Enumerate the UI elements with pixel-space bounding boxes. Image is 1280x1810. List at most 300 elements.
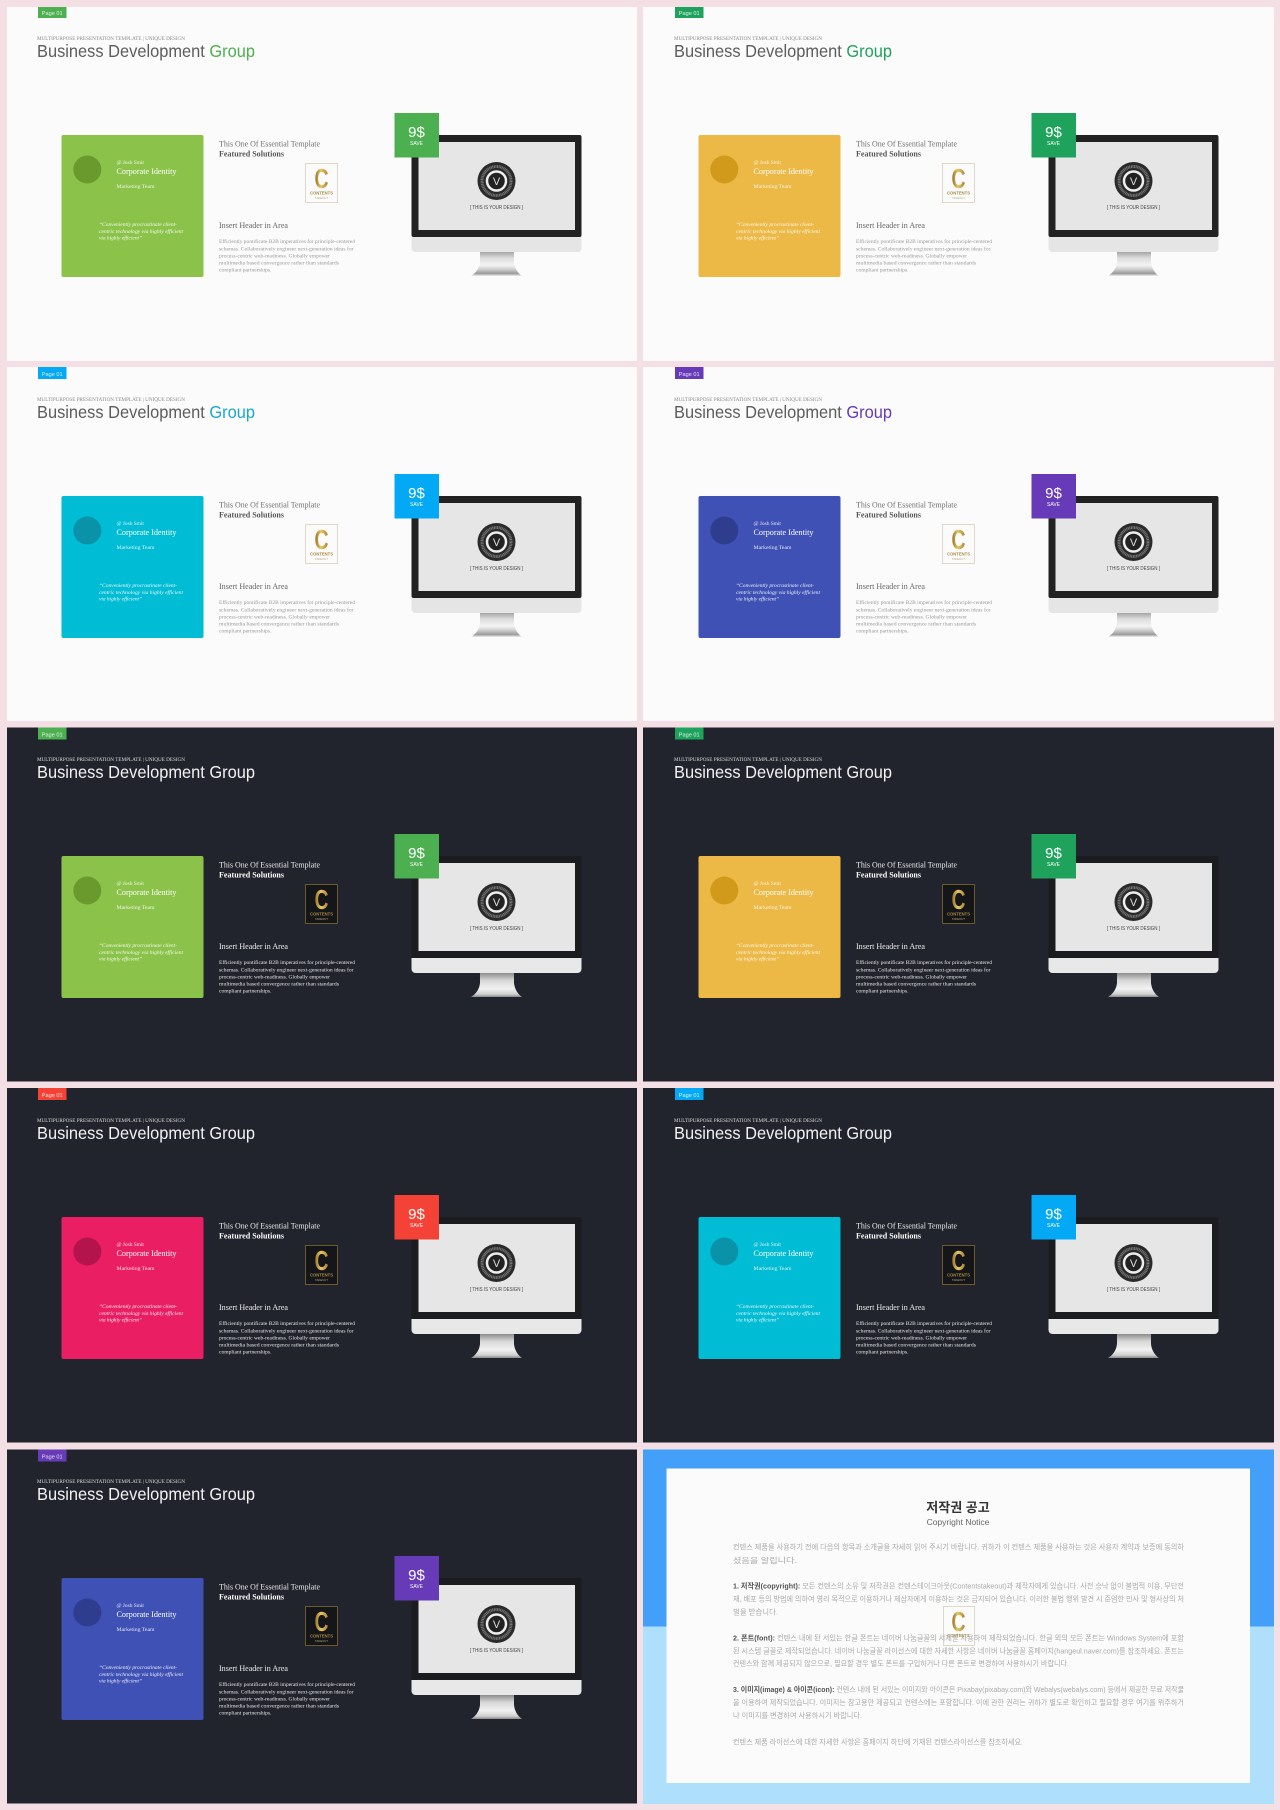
price badge: SAVE bbox=[410, 1223, 424, 1229]
profile card: centric technology via highly efficient bbox=[736, 228, 821, 235]
page tag: Page 01 bbox=[679, 732, 700, 738]
page tag: Page 01 bbox=[42, 1093, 63, 1099]
text block: insert header: multimedia based convergence rather than standards bbox=[856, 1342, 976, 1348]
text block: insert header: process-centric web-readiness. Globally empower bbox=[219, 974, 330, 980]
title: Business Development Group bbox=[674, 762, 892, 782]
profile card: “Conveniently procrastinate client- bbox=[736, 221, 814, 228]
text block: insert header bbox=[856, 221, 992, 274]
text block: featured solutions bbox=[856, 860, 957, 880]
text block: insert header: process-centric web-readiness. Globally empower bbox=[856, 1335, 967, 1341]
profile card bbox=[698, 135, 840, 277]
page tag: Page 01 bbox=[42, 732, 63, 738]
text block: insert header: schemas. Collaboratively engineer next-generation ideas for bbox=[856, 966, 991, 973]
text block: insert header: Efficiently pontificate B2B imperatives for principle-centered bbox=[856, 959, 992, 966]
text block: insert header: schemas. Collaboratively engineer next-generation ideas for bbox=[856, 245, 991, 252]
text block: insert header: multimedia based convergence rather than standards bbox=[856, 621, 976, 627]
text block: insert header: process-centric web-readiness. Globally empower bbox=[219, 1335, 330, 1341]
notice body text: 벌을 받습니다. bbox=[733, 1608, 778, 1616]
monitor mockup: [ THIS IS YOUR DESIGN ] bbox=[470, 1648, 524, 1654]
text block: insert header: Efficiently pontificate B2B imperatives for principle-centered bbox=[219, 238, 355, 245]
text block: featured solutions bbox=[219, 500, 320, 520]
panel: light indigo slide bbox=[643, 367, 1274, 721]
notice body text: 컨텐스와 함께 제공되지 않으므로, 필요할 경우 별도 폰트를 구입하거나 다른 폰트로 변경하여 사용하시기 바랍니다. bbox=[733, 1659, 1069, 1668]
price badge bbox=[1032, 474, 1076, 518]
logo badge bbox=[942, 524, 974, 564]
text block: insert header: process-centric web-readiness. Globally empower bbox=[856, 614, 967, 620]
price badge bbox=[394, 1556, 439, 1600]
monitor mockup: [ THIS IS YOUR DESIGN ] bbox=[470, 205, 524, 211]
text block: insert header: schemas. Collaboratively engineer next-generation ideas for bbox=[219, 1688, 354, 1695]
notice body text: 3. 이미지(image) & 아이콘(icon): 컨텐스 내에 된 서있는 이미지와 아이콘은 Pixabay(pixabay.com)와 Webalys(webalys.com) 등에서 제공한 무료 저작물 bbox=[733, 1685, 1184, 1694]
logo badge: TAKEOUT bbox=[952, 557, 965, 561]
profile card: Marketing Team bbox=[116, 1627, 155, 1633]
text block: insert header: compliant partnerships. bbox=[219, 1710, 272, 1716]
text block: featured solutions: Featured Solutions bbox=[856, 150, 921, 158]
price badge: SAVE bbox=[1047, 141, 1061, 147]
price badge: 9$ bbox=[408, 485, 425, 502]
profile card bbox=[698, 856, 840, 998]
profile card: “Conveniently procrastinate client- bbox=[99, 1664, 177, 1671]
monitor mockup bbox=[1048, 496, 1218, 637]
text block: insert header: compliant partnerships. bbox=[856, 1350, 909, 1356]
text block: featured solutions bbox=[856, 500, 957, 520]
profile card: Marketing Team bbox=[754, 184, 792, 190]
title: Business Development Group bbox=[37, 1484, 255, 1504]
page tag bbox=[38, 1088, 66, 1100]
text block: insert header: schemas. Collaboratively engineer next-generation ideas for bbox=[219, 1327, 354, 1334]
panel: dark green slide bbox=[7, 728, 637, 1082]
monitor mockup: V bbox=[1130, 176, 1138, 188]
text block: featured solutions: This One Of Essential Template bbox=[219, 1582, 320, 1592]
notice body text: 을 이용하여 제작되었습니다. 이미지는 참고용만 제공되고 컨텐스에는 포함합니다. 이에 관한 권리는 귀하가 별도로 확인하고 필요할 경우 여기를 위주하거 bbox=[733, 1698, 1184, 1707]
price badge: SAVE bbox=[410, 141, 424, 147]
text block: insert header: Efficiently pontificate B2B imperatives for principle-centered bbox=[856, 1320, 992, 1327]
price badge bbox=[1032, 834, 1076, 878]
profile card: via highly efficient” bbox=[99, 1678, 142, 1684]
text block: insert header bbox=[856, 942, 992, 994]
text block: insert header: Insert Header in Area bbox=[219, 942, 288, 951]
profile card bbox=[62, 135, 204, 277]
logo badge bbox=[306, 884, 338, 924]
page tag: Page 01 bbox=[679, 372, 700, 378]
text block: featured solutions bbox=[219, 140, 320, 158]
monitor mockup: V bbox=[493, 1619, 501, 1631]
price badge: SAVE bbox=[410, 1584, 424, 1590]
monitor mockup: V bbox=[493, 537, 501, 549]
price badge: 9$ bbox=[1045, 485, 1062, 502]
text block: featured solutions bbox=[856, 1222, 957, 1240]
logo badge: CONTENTS bbox=[947, 1272, 970, 1278]
text block: insert header: multimedia based convergence rather than standards bbox=[856, 981, 976, 987]
subtitle: MULTIPURPOSE PRESENTATION TEMPLATE | UNIQUE DESIGN bbox=[674, 1118, 822, 1124]
monitor mockup: V bbox=[1130, 537, 1138, 549]
text block: featured solutions: This One Of Essential Template bbox=[856, 140, 957, 148]
profile card bbox=[62, 496, 204, 638]
profile card bbox=[62, 856, 204, 998]
logo badge: CONTENTS bbox=[310, 1634, 333, 1638]
page tag: Page 01 bbox=[42, 1454, 63, 1460]
logo badge: C bbox=[314, 884, 328, 915]
logo badge bbox=[942, 163, 974, 202]
text block: featured solutions: Featured Solutions bbox=[856, 510, 921, 520]
profile card: via highly efficient” bbox=[99, 596, 142, 602]
notice body text: 셨음을 알립니다. bbox=[733, 1556, 797, 1565]
title: Business Development Group bbox=[674, 1123, 892, 1143]
title: Business Development Group bbox=[674, 402, 892, 422]
profile card: @ Josh Smit bbox=[116, 1242, 144, 1248]
page tag bbox=[38, 7, 66, 18]
panel: light yellow slide bbox=[643, 7, 1274, 361]
text block: insert header: multimedia based convergence rather than standards bbox=[219, 621, 339, 627]
price badge: SAVE bbox=[410, 502, 424, 508]
logo badge: CONTENTS bbox=[310, 1272, 333, 1278]
page tag bbox=[38, 728, 66, 740]
text block: featured solutions: Featured Solutions bbox=[219, 510, 284, 520]
page tag bbox=[675, 7, 704, 18]
text block: insert header: compliant partnerships. bbox=[856, 988, 909, 994]
logo badge: TAKEOUT bbox=[315, 917, 328, 921]
text block: insert header: Insert Header in Area bbox=[219, 1303, 288, 1312]
text block: featured solutions: This One Of Essential Template bbox=[856, 500, 957, 510]
notice body text: 2. 폰트(font): 컨텐스 내에 된 서있는 한글 폰트는 네이버 나눔글꼴의 서체를 사용하여 제작되었습니다. 한글 외의 모든 폰트는 Windows System에 포함 bbox=[733, 1634, 1184, 1642]
logo badge bbox=[306, 163, 338, 202]
page tag: Page 01 bbox=[679, 1093, 700, 1099]
panel: copyright notice bbox=[643, 1450, 1274, 1804]
profile card: centric technology via highly efficient bbox=[99, 589, 184, 596]
text block: insert header: multimedia based convergence rather than standards bbox=[219, 981, 339, 987]
text block: insert header: schemas. Collaboratively engineer next-generation ideas for bbox=[856, 1327, 991, 1334]
profile card: Marketing Team bbox=[116, 1266, 155, 1272]
profile card: Corporate Identity bbox=[754, 887, 814, 897]
profile card: “Conveniently procrastinate client- bbox=[99, 582, 177, 589]
page tag bbox=[675, 1088, 704, 1100]
title: Business Development Group bbox=[37, 41, 255, 61]
logo badge: C bbox=[314, 1245, 328, 1276]
profile card: centric technology via highly efficient bbox=[736, 1310, 821, 1317]
profile card: centric technology via highly efficient bbox=[99, 1310, 184, 1317]
logo badge: CONTENTS bbox=[947, 190, 970, 196]
logo badge: C bbox=[314, 524, 328, 555]
text block: featured solutions: Featured Solutions bbox=[856, 870, 921, 880]
monitor mockup: [ THIS IS YOUR DESIGN ] bbox=[1107, 1287, 1161, 1293]
price badge: 9$ bbox=[408, 845, 425, 862]
profile card: centric technology via highly efficient bbox=[99, 949, 184, 956]
notice body text: 1. 저작권(copyright): 모든 컨텐스의 소유 및 저작권은 컨텐스테이크아웃(Contentstakeout)과 제작자에게 있습니다. 사전 승낙 없이 불법적 이용, 무단전 bbox=[733, 1582, 1184, 1590]
panel: light cyan slide bbox=[7, 367, 637, 721]
logo badge: TAKEOUT bbox=[315, 557, 328, 561]
profile card: @ Josh Smit bbox=[754, 881, 781, 887]
logo watermark bbox=[944, 1606, 974, 1646]
monitor mockup bbox=[1048, 856, 1218, 997]
text block: featured solutions bbox=[856, 140, 957, 158]
panel: dark indigo slide bbox=[7, 1450, 637, 1804]
text block: insert header: multimedia based convergence rather than standards bbox=[856, 260, 976, 266]
text block: insert header: Insert Header in Area bbox=[219, 221, 288, 230]
profile card: “Conveniently procrastinate client- bbox=[99, 1303, 177, 1310]
text block: featured solutions: This One Of Essential Template bbox=[219, 140, 320, 148]
logo badge bbox=[306, 1245, 338, 1284]
monitor mockup: [ THIS IS YOUR DESIGN ] bbox=[1107, 926, 1161, 932]
profile card: via highly efficient” bbox=[99, 1316, 142, 1324]
monitor mockup: V bbox=[493, 176, 501, 188]
logo badge: C bbox=[952, 163, 966, 194]
profile card: @ Josh Smit bbox=[116, 881, 144, 887]
profile card: Corporate Identity bbox=[116, 887, 177, 897]
text block: insert header: Efficiently pontificate B2B imperatives for principle-centered bbox=[219, 959, 355, 966]
profile card: @ Josh Smit bbox=[754, 1242, 781, 1248]
logo badge: TAKEOUT bbox=[315, 1639, 328, 1643]
text block: featured solutions: Featured Solutions bbox=[856, 1232, 921, 1240]
monitor mockup: [ THIS IS YOUR DESIGN ] bbox=[1107, 205, 1161, 211]
subtitle: MULTIPURPOSE PRESENTATION TEMPLATE | UNIQUE DESIGN bbox=[37, 1118, 185, 1124]
text block: insert header: schemas. Collaboratively engineer next-generation ideas for bbox=[219, 966, 354, 973]
profile card: @ Josh Smit bbox=[754, 521, 781, 527]
subtitle: MULTIPURPOSE PRESENTATION TEMPLATE | UNIQUE DESIGN bbox=[674, 397, 822, 403]
text block: featured solutions: Featured Solutions bbox=[219, 870, 284, 880]
notice body text: 된 시스템 글꼴로 제작되었습니다. 네이버 나눔글꼴 라이선스에 대한 자세한 사항은 네이버 나눔글꼴 홈페이지(hangeul.naver.com)를 참조하세요. 폰트는 bbox=[733, 1646, 1184, 1656]
logo badge: C bbox=[314, 1606, 328, 1637]
logo badge bbox=[942, 884, 974, 924]
profile card: centric technology via highly efficient bbox=[736, 949, 821, 956]
text block: insert header: Insert Header in Area bbox=[856, 1303, 925, 1312]
price badge: 9$ bbox=[1045, 124, 1062, 141]
price badge: SAVE bbox=[1047, 862, 1061, 868]
logo badge: C bbox=[952, 1245, 966, 1276]
panel: dark yellow slide bbox=[643, 728, 1274, 1082]
profile card: via highly efficient” bbox=[736, 956, 779, 962]
text block: insert header: compliant partnerships. bbox=[219, 1350, 272, 1356]
profile card: “Conveniently procrastinate client- bbox=[736, 582, 814, 589]
profile card: @ Josh Smit bbox=[116, 160, 144, 166]
logo badge: TAKEOUT bbox=[315, 1278, 328, 1282]
text block: insert header: Efficiently pontificate B2B imperatives for principle-centered bbox=[219, 1681, 355, 1688]
price badge: SAVE bbox=[1047, 1223, 1061, 1229]
monitor mockup bbox=[1048, 135, 1218, 276]
price badge: 9$ bbox=[408, 1567, 425, 1584]
text block: insert header bbox=[856, 582, 992, 634]
profile card bbox=[62, 1217, 204, 1359]
logo watermark: CONTENTS bbox=[948, 1633, 970, 1638]
notice body text: 컨텐스 제품 라이선스에 대한 자세한 사항은 홈페이지 하단에 기재된 컨텐스라이선스를 참조하세요. bbox=[733, 1738, 1023, 1746]
logo watermark: C bbox=[952, 1606, 966, 1637]
title: Business Development Group bbox=[37, 402, 255, 422]
monitor mockup bbox=[1048, 1217, 1218, 1358]
text block: insert header: compliant partnerships. bbox=[219, 628, 272, 634]
text block: insert header: schemas. Collaboratively engineer next-generation ideas for bbox=[219, 245, 354, 252]
text block: insert header: process-centric web-readiness. Globally empower bbox=[219, 1696, 330, 1702]
text block: insert header bbox=[219, 1664, 355, 1716]
text block: insert header: Insert Header in Area bbox=[219, 582, 288, 591]
profile card: Marketing Team bbox=[754, 1266, 792, 1272]
profile card: via highly efficient” bbox=[99, 956, 142, 962]
price badge bbox=[1032, 113, 1076, 158]
text block: insert header: compliant partnerships. bbox=[856, 628, 909, 634]
monitor mockup: [ THIS IS YOUR DESIGN ] bbox=[1107, 566, 1161, 572]
notice body text: 나 이미지를 변경하여 사용하시기 바랍니다. bbox=[733, 1711, 862, 1720]
page tag bbox=[38, 1450, 66, 1462]
price badge: SAVE bbox=[1047, 502, 1061, 508]
text block: insert header: compliant partnerships. bbox=[219, 988, 272, 994]
logo badge: CONTENTS bbox=[947, 912, 970, 916]
subtitle: MULTIPURPOSE PRESENTATION TEMPLATE | UNIQUE DESIGN bbox=[37, 1479, 185, 1485]
profile card: via highly efficient” bbox=[736, 234, 779, 242]
notice body text: 재, 배포 등의 방법에 의하여 영리 목적으로 이용하거나 제삼자에게 이용하는 것은 금지되어 있습니다. 이러한 불법 행위 발견 시 준엄한 민사 및 형사상의 처 bbox=[733, 1594, 1184, 1604]
notice subtitle: Copyright Notice bbox=[927, 1517, 990, 1527]
profile card: Marketing Team bbox=[116, 545, 155, 551]
profile card: “Conveniently procrastinate client- bbox=[736, 942, 814, 949]
profile card: Marketing Team bbox=[754, 545, 792, 551]
logo badge: CONTENTS bbox=[947, 552, 970, 556]
text block: insert header: Insert Header in Area bbox=[856, 582, 925, 591]
profile card: Corporate Identity bbox=[754, 1248, 814, 1258]
text block: featured solutions bbox=[219, 1222, 320, 1240]
logo badge: TAKEOUT bbox=[315, 196, 328, 200]
monitor mockup bbox=[412, 1578, 582, 1719]
profile card: centric technology via highly efficient bbox=[99, 1671, 184, 1678]
price badge: 9$ bbox=[408, 124, 425, 141]
title: Business Development Group bbox=[37, 762, 255, 782]
price badge: 9$ bbox=[1045, 1206, 1062, 1223]
text block: insert header: Efficiently pontificate B2B imperatives for principle-centered bbox=[219, 599, 355, 606]
logo badge bbox=[306, 1606, 338, 1646]
logo badge bbox=[942, 1245, 974, 1284]
text block: featured solutions: This One Of Essential Template bbox=[856, 1222, 957, 1230]
page tag bbox=[675, 728, 704, 740]
text block: insert header: Efficiently pontificate B2B imperatives for principle-centered bbox=[856, 238, 992, 245]
monitor mockup: [ THIS IS YOUR DESIGN ] bbox=[470, 1287, 524, 1293]
price badge bbox=[394, 474, 439, 518]
panel: light green slide bbox=[7, 7, 637, 361]
text block: featured solutions: Featured Solutions bbox=[219, 150, 284, 158]
text block: insert header bbox=[219, 221, 355, 274]
notice title: 저작권 공고 bbox=[926, 1500, 990, 1515]
profile card bbox=[698, 1217, 840, 1359]
profile card: “Conveniently procrastinate client- bbox=[736, 1303, 814, 1310]
monitor mockup: V bbox=[493, 1258, 501, 1270]
profile card: Marketing Team bbox=[116, 184, 155, 190]
monitor mockup bbox=[412, 496, 582, 637]
monitor mockup bbox=[412, 1217, 582, 1358]
text block: insert header bbox=[219, 1303, 355, 1356]
logo badge: C bbox=[952, 884, 966, 915]
profile card: “Conveniently procrastinate client- bbox=[99, 942, 177, 949]
monitor mockup: [ THIS IS YOUR DESIGN ] bbox=[470, 926, 524, 932]
panel: dark pink slide bbox=[7, 1088, 637, 1442]
notice body text bbox=[733, 1542, 1184, 1746]
text block: insert header: Insert Header in Area bbox=[856, 221, 925, 230]
price badge: 9$ bbox=[1045, 845, 1062, 862]
text block: insert header: multimedia based convergence rather than standards bbox=[219, 260, 339, 266]
monitor mockup: V bbox=[493, 897, 501, 909]
profile card: @ Josh Smit bbox=[754, 160, 781, 166]
text block: insert header: compliant partnerships. bbox=[856, 268, 909, 274]
text block: featured solutions: This One Of Essential Template bbox=[219, 860, 320, 870]
logo badge: C bbox=[952, 524, 966, 555]
text block: insert header: Efficiently pontificate B2B imperatives for principle-centered bbox=[856, 599, 992, 606]
price badge bbox=[394, 834, 439, 878]
subtitle: MULTIPURPOSE PRESENTATION TEMPLATE | UNIQUE DESIGN bbox=[674, 757, 822, 763]
profile card: @ Josh Smit bbox=[116, 1603, 144, 1609]
logo badge: CONTENTS bbox=[310, 190, 333, 196]
notice body text: 컨텐스 제품을 사용하기 전에 다음의 항목과 소개글을 자세히 읽어 주시기 바랍니다. 귀하가 이 컨텐스 제품을 사용하는 것은 사용자 계약과 보증에 동의하 bbox=[733, 1542, 1184, 1552]
profile card bbox=[62, 1578, 204, 1720]
monitor mockup bbox=[412, 135, 582, 276]
text block: featured solutions bbox=[219, 1582, 320, 1602]
text block: featured solutions: This One Of Essential Template bbox=[856, 860, 957, 870]
text block: featured solutions: Featured Solutions bbox=[219, 1592, 284, 1602]
profile card: via highly efficient” bbox=[99, 234, 142, 242]
page tag: Page 01 bbox=[42, 11, 63, 17]
text block: insert header: Insert Header in Area bbox=[856, 942, 925, 951]
text block: insert header: process-centric web-readiness. Globally empower bbox=[219, 253, 330, 259]
logo badge: TAKEOUT bbox=[952, 196, 965, 200]
profile card: Corporate Identity bbox=[754, 166, 814, 176]
text block: featured solutions bbox=[219, 860, 320, 880]
monitor mockup bbox=[412, 856, 582, 997]
text block: insert header bbox=[219, 942, 355, 994]
text block: featured solutions: This One Of Essential Template bbox=[219, 500, 320, 510]
subtitle: MULTIPURPOSE PRESENTATION TEMPLATE | UNIQUE DESIGN bbox=[37, 757, 185, 763]
profile card: Corporate Identity bbox=[116, 1609, 177, 1619]
monitor mockup: [ THIS IS YOUR DESIGN ] bbox=[470, 566, 524, 572]
logo badge: CONTENTS bbox=[310, 552, 333, 556]
text block: insert header: multimedia based convergence rather than standards bbox=[219, 1703, 339, 1709]
price badge bbox=[394, 1195, 439, 1240]
title: Business Development Group bbox=[674, 41, 892, 61]
profile card: Corporate Identity bbox=[116, 527, 177, 537]
logo badge: CONTENTS bbox=[310, 912, 333, 916]
page tag bbox=[675, 367, 704, 379]
title: Business Development Group bbox=[37, 1123, 255, 1143]
text block: insert header: process-centric web-readiness. Globally empower bbox=[856, 974, 967, 980]
logo badge: TAKEOUT bbox=[952, 1278, 965, 1282]
profile card bbox=[698, 496, 840, 638]
text block: insert header: process-centric web-readiness. Globally empower bbox=[856, 253, 967, 259]
text block: insert header bbox=[219, 582, 355, 634]
subtitle: MULTIPURPOSE PRESENTATION TEMPLATE | UNIQUE DESIGN bbox=[674, 36, 822, 42]
text block: insert header: Efficiently pontificate B2B imperatives for principle-centered bbox=[219, 1320, 355, 1327]
text block: featured solutions: Featured Solutions bbox=[219, 1232, 284, 1240]
monitor mockup: V bbox=[1130, 1258, 1138, 1270]
text block: insert header: compliant partnerships. bbox=[219, 268, 272, 274]
text block: insert header: Insert Header in Area bbox=[219, 1664, 288, 1673]
text block: insert header: schemas. Collaboratively engineer next-generation ideas for bbox=[219, 606, 354, 613]
text block: insert header: process-centric web-readiness. Globally empower bbox=[219, 614, 330, 620]
logo badge: C bbox=[314, 163, 328, 194]
text block: insert header bbox=[856, 1303, 992, 1356]
profile card: “Conveniently procrastinate client- bbox=[99, 221, 177, 228]
profile card: Marketing Team bbox=[754, 905, 792, 911]
text block: insert header: multimedia based convergence rather than standards bbox=[219, 1342, 339, 1348]
subtitle: MULTIPURPOSE PRESENTATION TEMPLATE | UNIQUE DESIGN bbox=[37, 36, 185, 42]
profile card: @ Josh Smit bbox=[116, 521, 144, 527]
price badge: SAVE bbox=[410, 862, 424, 868]
logo badge bbox=[306, 524, 338, 564]
text block: featured solutions: This One Of Essential Template bbox=[219, 1222, 320, 1230]
monitor mockup: V bbox=[1130, 897, 1138, 909]
profile card: Corporate Identity bbox=[116, 1248, 177, 1258]
profile card: via highly efficient” bbox=[736, 1316, 779, 1324]
profile card: centric technology via highly efficient bbox=[736, 589, 821, 596]
price badge: 9$ bbox=[408, 1206, 425, 1223]
profile card: Corporate Identity bbox=[754, 527, 814, 537]
profile card: via highly efficient” bbox=[736, 596, 779, 602]
profile card: centric technology via highly efficient bbox=[99, 228, 184, 235]
logo badge: TAKEOUT bbox=[952, 917, 965, 921]
price badge bbox=[1032, 1195, 1076, 1240]
subtitle: MULTIPURPOSE PRESENTATION TEMPLATE | UNIQUE DESIGN bbox=[37, 397, 185, 403]
page tag: Page 01 bbox=[42, 372, 63, 378]
